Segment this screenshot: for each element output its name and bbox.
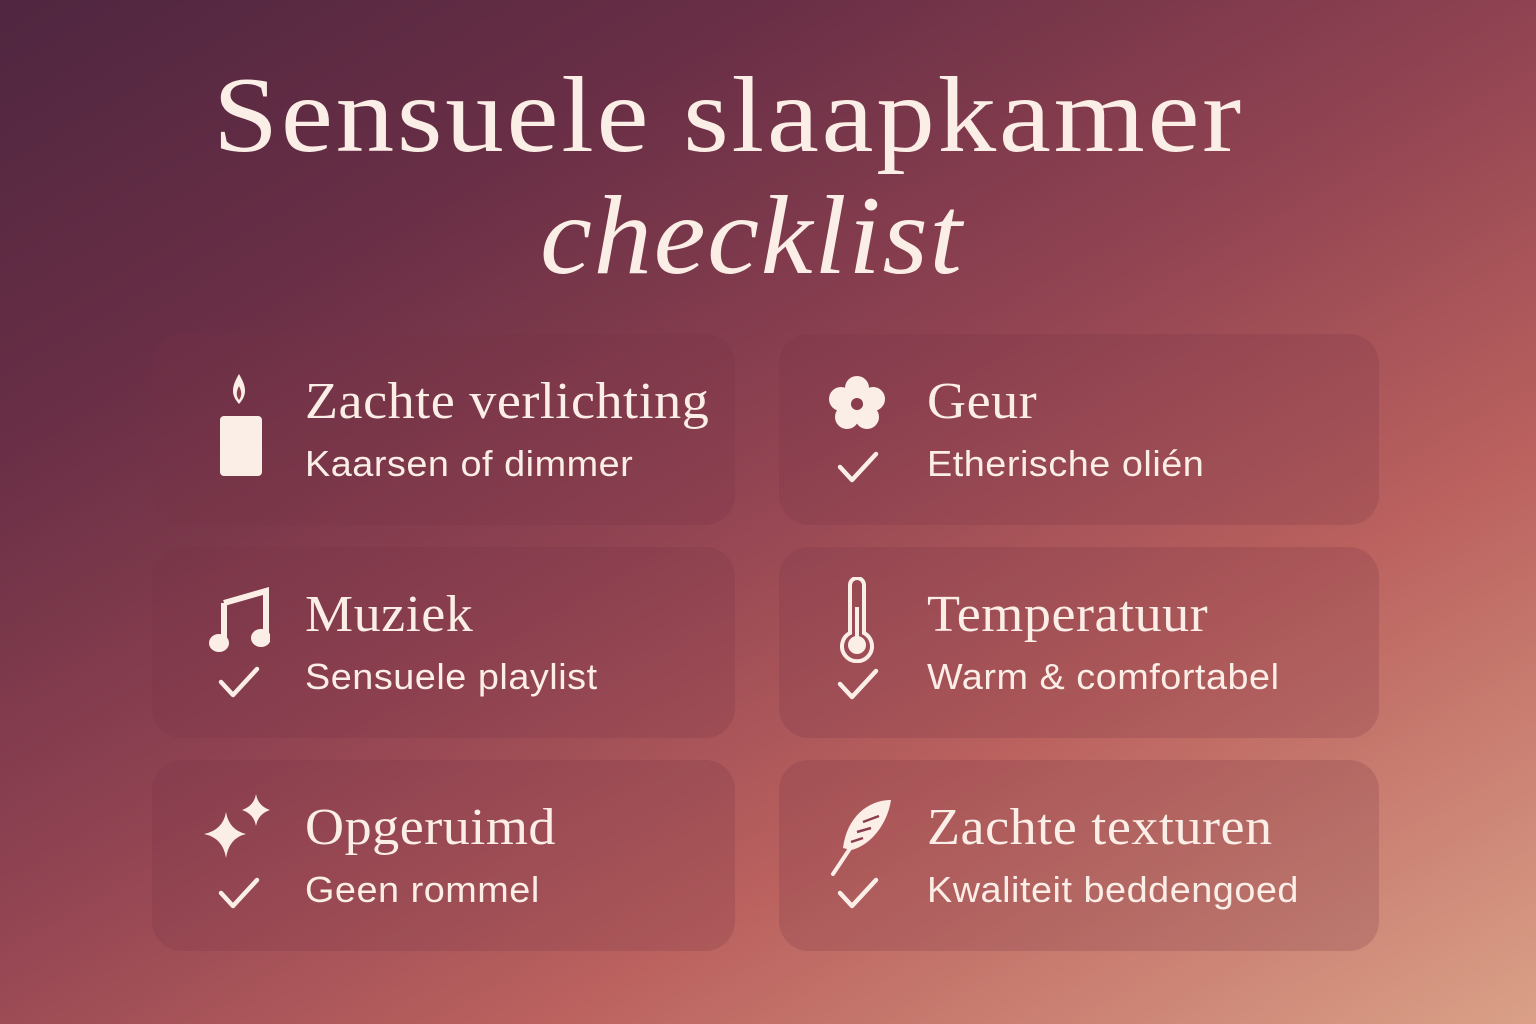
- icon: thermometer: [840, 577, 874, 663]
- card: zachte verlichting: Kaarsen of dimmer: [305, 443, 633, 484]
- icon: music note: [209, 587, 270, 652]
- icon: check: [218, 878, 260, 908]
- card: zachte texturen: Kwaliteit beddengoed: [927, 869, 1299, 910]
- card: temperatuur: [779, 547, 1379, 738]
- card: muziek: Sensuele playlist: [305, 656, 598, 697]
- card: opgeruimd: Opgeruimd: [305, 799, 556, 856]
- icon: check: [218, 666, 260, 698]
- card: geur: Etherische olién: [927, 443, 1204, 484]
- card: zachte texturen: Zachte texturen: [927, 799, 1273, 856]
- card: opgeruimd: Geen rommel: [305, 869, 540, 910]
- card: geur: Geur: [927, 373, 1037, 430]
- icon: check: [838, 878, 878, 908]
- icon: sparkles: [204, 794, 270, 858]
- title: Sensuele slaapkamer: [213, 56, 1244, 175]
- card: muziek: Muziek: [305, 586, 473, 643]
- subtitle: checklist: [540, 174, 964, 298]
- card: muziek: [152, 547, 735, 738]
- icon: check: [838, 452, 878, 482]
- card: zachte texturen: [779, 760, 1379, 951]
- card: zachte verlichting: [152, 334, 735, 525]
- card: temperatuur: Warm & comfortabel: [927, 656, 1280, 697]
- icon: flower: [829, 376, 885, 429]
- card: opgeruimd: [152, 760, 735, 951]
- card: zachte verlichting: Zachte verlichting: [305, 373, 709, 430]
- icon: feather: [830, 800, 891, 876]
- card: geur: [779, 334, 1379, 525]
- icon: candle: [220, 374, 262, 476]
- icon: check: [838, 668, 878, 700]
- card: temperatuur: Temperatuur: [927, 586, 1208, 643]
